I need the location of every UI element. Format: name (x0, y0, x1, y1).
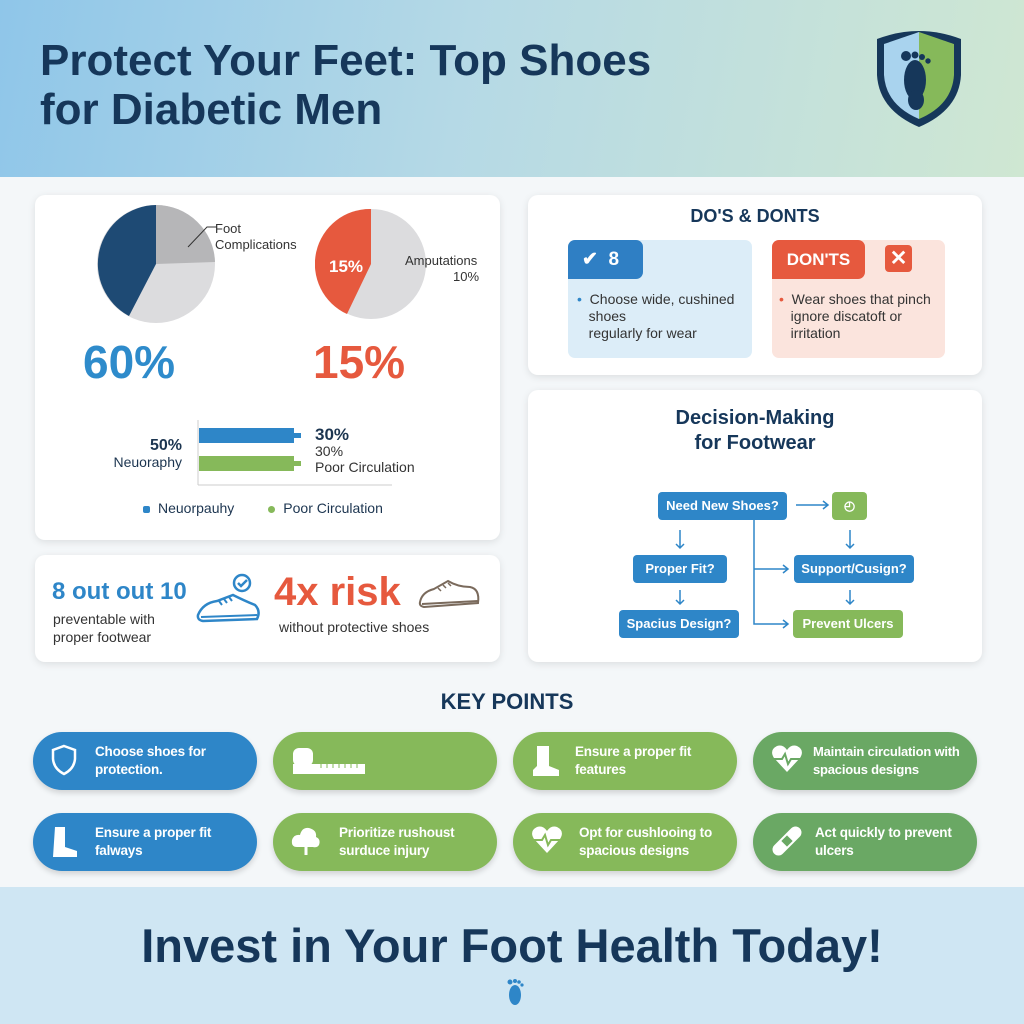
heading: key points: KEY POINTS (441, 689, 573, 714)
panel: statistics charts: 30% (315, 425, 349, 444)
icon: shield with foot (877, 31, 961, 127)
do box: ✔ 8 (582, 249, 619, 270)
pill: prioritize: surduce injury (339, 843, 429, 858)
flow box: need new shoes: Need New Shoes? (666, 498, 779, 513)
do box: regularly for wear (589, 325, 697, 341)
label: foot complications: Foot (215, 221, 241, 236)
icon: sneaker with check (196, 574, 260, 622)
flow box: need new shoes (658, 492, 787, 520)
pill: proper fit features (513, 732, 737, 790)
panel: statistics charts (35, 195, 500, 540)
do box (568, 240, 752, 358)
pill: measuring tape (273, 732, 497, 790)
stat: 4x risk: 4x risk (274, 570, 401, 614)
dont box: • Wear shoes that pinch (779, 291, 931, 307)
bar labels: Neuoraphy (114, 454, 182, 470)
pill: prioritize (273, 813, 497, 871)
panel: statistics charts: Poor Circulation (315, 459, 415, 475)
panel: risk stats (35, 555, 500, 662)
heading: Decision-Making (676, 407, 834, 429)
dont box: ✕ (890, 247, 907, 270)
big stat 60%: 60% (83, 336, 175, 388)
label: foot complications: Complications (215, 237, 297, 252)
pie chart: amputations: 15% (329, 257, 363, 276)
do box: shoes (589, 308, 626, 324)
flow box: prevent ulcers: Prevent Ulcers (802, 616, 894, 631)
pill: proper fit always: falways (95, 843, 142, 858)
do box: • Choose wide, cushined (577, 291, 734, 307)
panel: statistics charts: 30% (315, 443, 343, 459)
footer call to action: Invest in Your Foot Health Today! (141, 919, 883, 972)
icon: shoe outline (418, 580, 480, 608)
pill: proper fit features: Ensure a proper fit (575, 744, 691, 759)
dont box: irritation (791, 325, 840, 341)
pill: protection: protection. (95, 762, 163, 777)
title: for Diabetic Men (40, 85, 382, 134)
dont box: ignore discatoft or (791, 308, 902, 324)
pill: cushioning (513, 813, 737, 871)
flow box: proper fit: Proper Fit? (645, 561, 715, 576)
flow box: spacious design: Spacius Design? (627, 616, 731, 631)
panel: risk stats: preventable with (53, 611, 155, 627)
legend: Neuorpauhy Poor Circulation (158, 500, 383, 516)
dont box (772, 240, 945, 358)
pill: protection: Choose shoes for (95, 744, 206, 759)
label: amputations: Amputations (405, 253, 477, 268)
pie chart: amputations (315, 209, 426, 319)
pill: proper fit features: features (575, 762, 626, 777)
pill: proper fit always (33, 813, 257, 871)
panel: dos and donts (528, 195, 982, 375)
flow box: green icon (832, 492, 867, 520)
pill: ulcers: Act quickly to prevent (815, 825, 952, 840)
label: foot complications (215, 221, 297, 252)
pill: ulcers: ulcers (815, 843, 854, 858)
pill: circulation (753, 732, 977, 790)
flow arrows (676, 500, 854, 629)
heading: for Footwear (694, 432, 816, 454)
dont box: DON'TS (787, 250, 850, 269)
pill: prioritize: Prioritize rushoust (339, 825, 454, 840)
pill: circulation: Maintain circulation with (813, 744, 960, 759)
header banner (0, 0, 1024, 177)
stat: 8 out of 10: 8 out out 10 (52, 578, 187, 605)
label: amputations: 10% (453, 269, 479, 284)
flow box: spacious design (619, 610, 739, 638)
panel: risk stats: without protective shoes (279, 619, 429, 635)
footer banner (0, 887, 1024, 1024)
bar labels: 50% (150, 437, 182, 454)
icon: footprint (508, 979, 524, 1005)
panel: decision making flowchart (528, 390, 982, 662)
bar labels (114, 437, 182, 470)
label: amputations (405, 253, 479, 284)
flow box: green icon: ◴ (844, 498, 855, 513)
panel: risk stats: proper footwear (53, 629, 151, 645)
pill: cushioning: spacious designs (579, 843, 689, 858)
heading (676, 407, 834, 454)
title (40, 36, 651, 134)
flow box: support (794, 555, 914, 583)
bar chart (198, 420, 392, 486)
pill: circulation: spacious designs (813, 762, 919, 777)
pill: cushioning: Opt for cushlooing to (579, 825, 712, 840)
title: Protect Your Feet: Top Shoes (40, 36, 651, 85)
flow box: prevent ulcers (793, 610, 903, 638)
flow box: proper fit (633, 555, 727, 583)
pie chart: foot complications (97, 205, 215, 323)
pill: protection (33, 732, 257, 790)
heading: DO'S & DONTS (690, 206, 820, 226)
flow box: support: Support/Cusign? (801, 561, 907, 576)
pill: proper fit always: Ensure a proper fit (95, 825, 211, 840)
big stat 15%: 15% (313, 336, 405, 388)
key points grid (31, 732, 979, 876)
pill: ulcers (753, 813, 977, 871)
